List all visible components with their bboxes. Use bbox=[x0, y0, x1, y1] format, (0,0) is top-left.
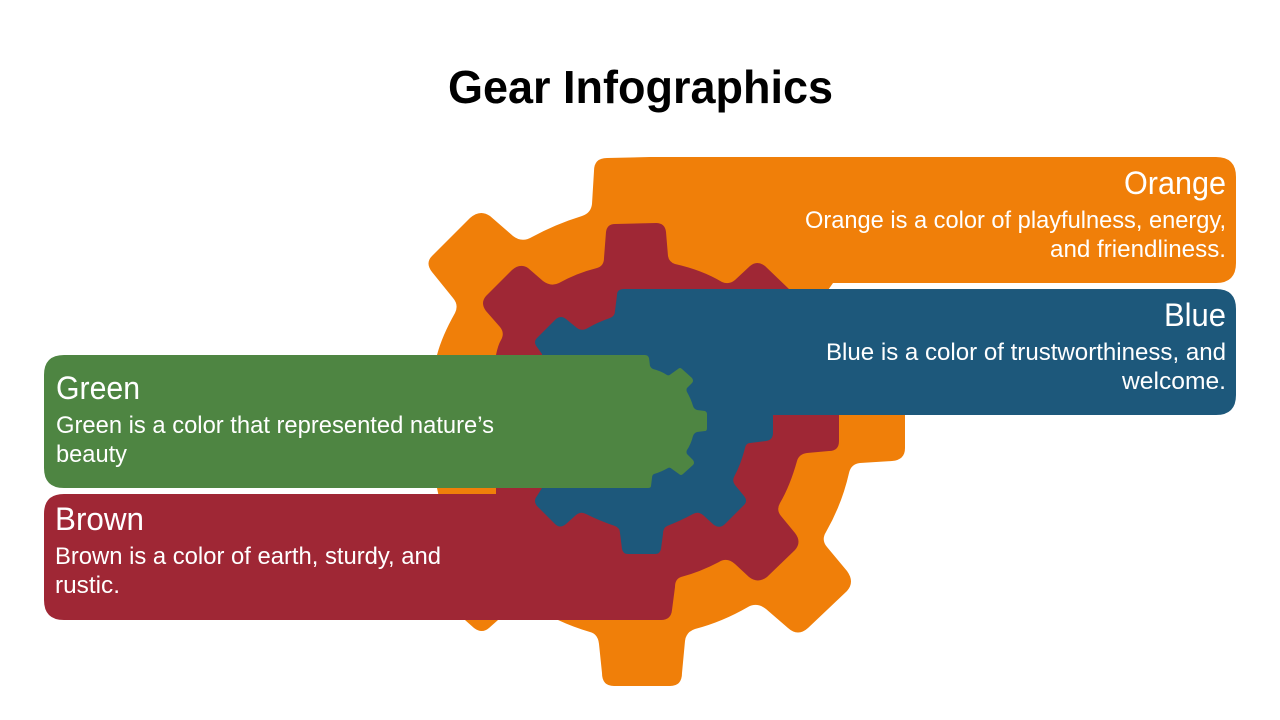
panel: blue gear and banner bbox=[535, 289, 1236, 554]
panel: orange gear and banner bbox=[428, 157, 1236, 686]
brown gear shape bbox=[44, 223, 839, 620]
brown heading: Brown bbox=[55, 501, 144, 537]
green description: Green is a color that represented nature’s bbox=[56, 412, 494, 439]
green heading: Green bbox=[56, 370, 140, 406]
orange description: and friendliness. bbox=[1050, 236, 1226, 263]
green description bbox=[56, 412, 494, 468]
brown description: Brown is a color of earth, sturdy, and bbox=[55, 543, 441, 570]
blue gear shape bbox=[535, 289, 1236, 554]
blue description: welcome. bbox=[1121, 368, 1226, 395]
orange gear shape bbox=[428, 157, 1236, 686]
blue heading: Blue bbox=[1164, 297, 1226, 333]
brown description: rustic. bbox=[55, 572, 120, 599]
orange heading: Orange bbox=[1124, 165, 1226, 201]
panel: green gear and banner bbox=[44, 355, 707, 488]
blue description: Blue is a color of trustworthiness, and bbox=[826, 339, 1226, 366]
title: Gear Infographics bbox=[448, 61, 833, 113]
orange description bbox=[805, 207, 1226, 263]
brown description bbox=[55, 543, 441, 599]
green description: beauty bbox=[56, 441, 127, 468]
panel: brown gear and banner bbox=[44, 223, 839, 620]
green gear shape bbox=[44, 355, 707, 488]
orange description: Orange is a color of playfulness, energy, bbox=[805, 207, 1226, 234]
blue description bbox=[826, 339, 1226, 395]
